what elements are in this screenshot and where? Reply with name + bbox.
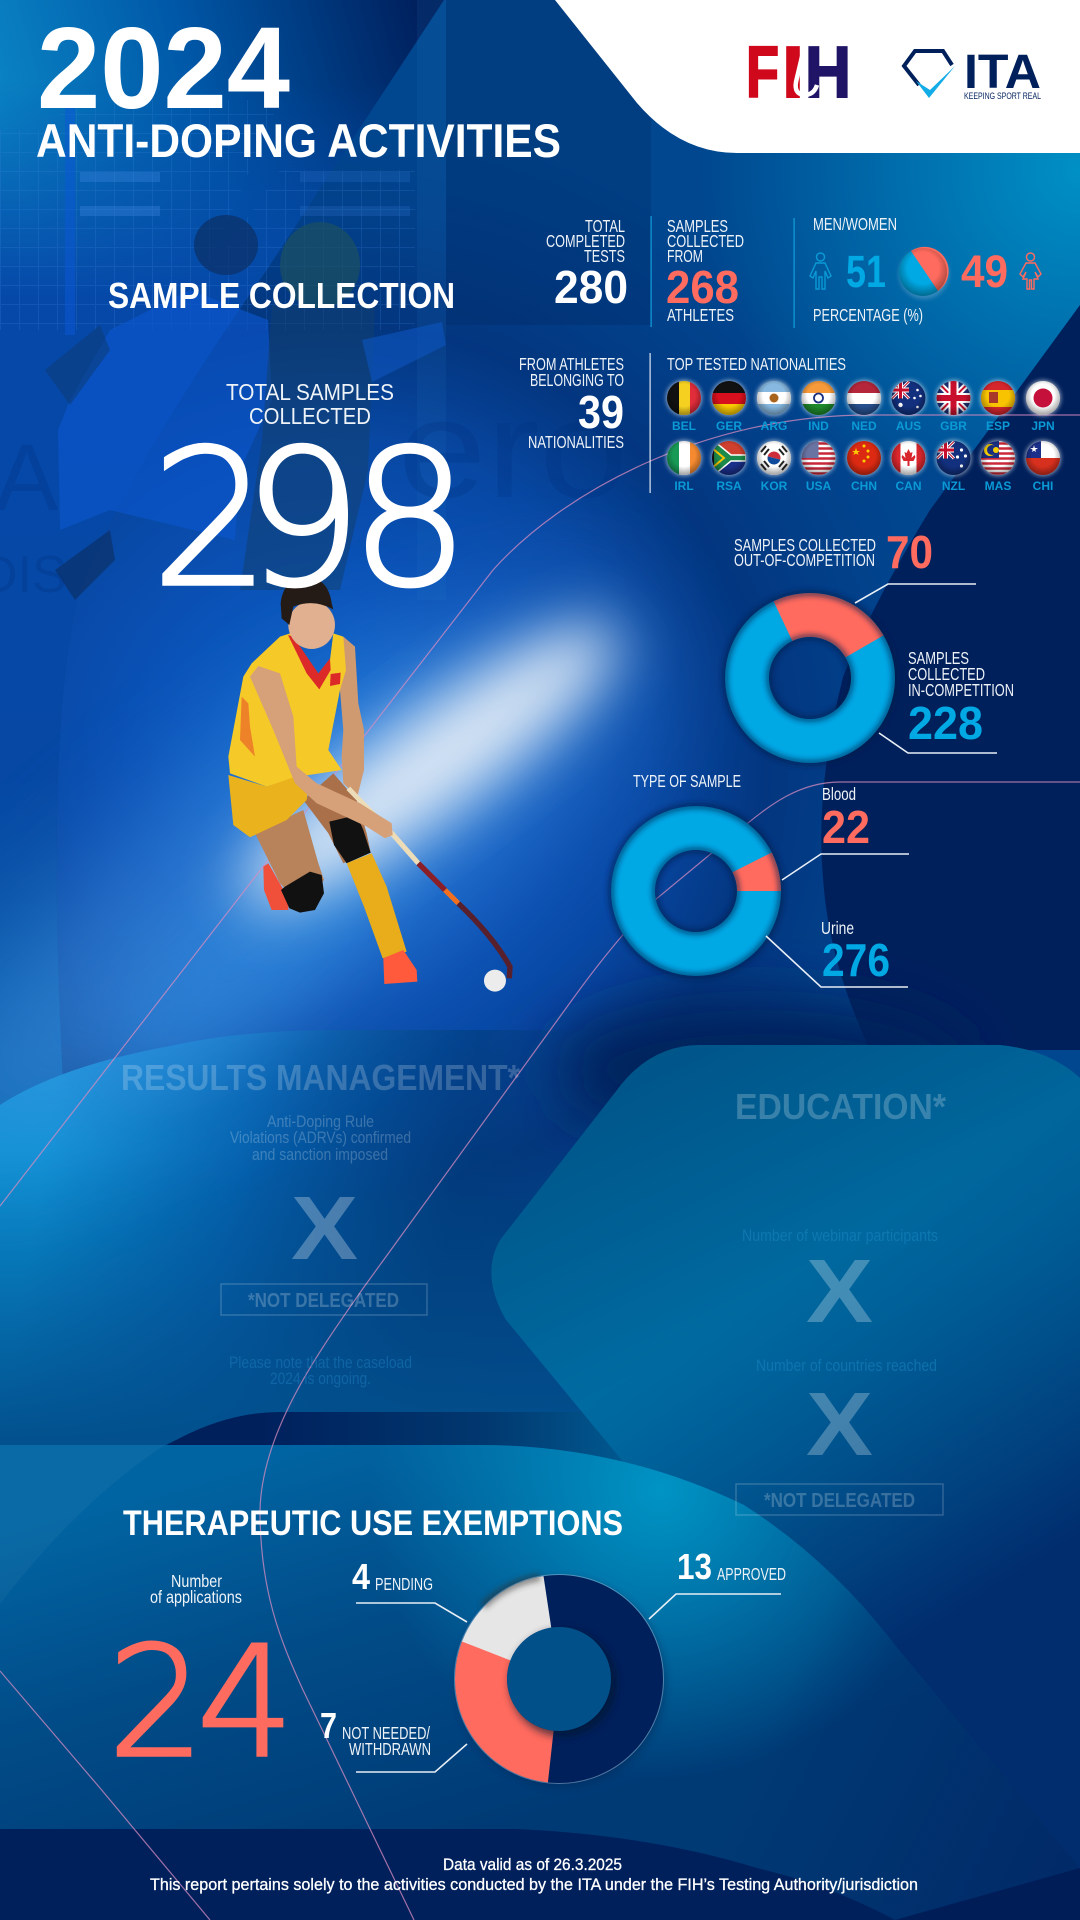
flag: USA <box>802 441 836 475</box>
panel: education: Number of webinar participants <box>742 1226 938 1245</box>
stat: men / women percentage: MEN/WOMEN <box>813 214 897 234</box>
chart: type of sample donut: Urine <box>821 918 854 938</box>
logo: FIH: F <box>746 33 779 113</box>
stat: samples collected from athletes: SAMPLES <box>667 216 728 236</box>
back arm <box>340 637 364 797</box>
flag labels: MAS <box>985 479 1011 493</box>
flag: New Zealand <box>936 441 970 475</box>
flag labels: IRL <box>674 479 694 493</box>
chart: therapeutic use exemptions donut: WITHDRAWN <box>349 1739 431 1759</box>
stat: nationalities <box>519 354 624 452</box>
flag labels: JPN <box>1031 419 1055 433</box>
panel: results management: Anti-Doping Rule <box>267 1112 374 1131</box>
chart: in and out of competition donut: IN-COMPETITION <box>908 680 1014 700</box>
stat: number of applications: of applications <box>150 1587 242 1607</box>
logo: FIH <box>746 33 851 113</box>
flag labels: ARG <box>761 419 787 433</box>
flag labels: USA <box>806 479 831 493</box>
chart: type of sample donut: 276 <box>822 934 890 986</box>
flag labels: NED <box>851 419 877 433</box>
flag: Netherlands <box>847 381 881 415</box>
panel: results management: RESULTS MANAGEMENT* <box>121 1057 520 1098</box>
stat: nationalities: BELONGING TO <box>530 370 624 390</box>
logo: ITA: ITA <box>964 46 1041 99</box>
pie: men women split <box>899 247 949 299</box>
rear leg <box>255 810 324 903</box>
chart: in and out of competition donut: SAMPLES COLLECTED <box>734 535 876 555</box>
panel: education: Number of countries reached <box>756 1356 937 1375</box>
title: 2024 <box>37 3 290 133</box>
flag labels: BEL <box>672 419 696 433</box>
flag: Argentina <box>757 381 791 415</box>
chart: in and out of competition donut: 70 <box>886 526 933 578</box>
stat: nationalities: NATIONALITIES <box>528 432 624 452</box>
chart: therapeutic use exemptions donut: 13 <box>677 1546 712 1587</box>
panel: education: X <box>806 1375 873 1475</box>
flag: Malaysia <box>981 441 1015 475</box>
flag labels: ESP <box>986 419 1010 433</box>
ball <box>484 970 506 992</box>
flag labels: RSA <box>716 479 742 493</box>
head <box>288 601 335 649</box>
footer note: This report pertains solely to the activities conducted by the ITA under the FIH’s Testing Authority/jurisdiction <box>150 1875 918 1894</box>
flag: South Africa <box>712 441 746 475</box>
flag: Belgium <box>667 381 701 415</box>
chart: therapeutic use exemptions donut: PENDING <box>375 1574 433 1594</box>
title <box>36 3 561 167</box>
flag labels: CHN <box>851 479 877 493</box>
panel: results management: and sanction imposed <box>252 1145 388 1164</box>
footer note: Data valid as of 26.3.2025 <box>443 1855 622 1874</box>
flag labels: CAN <box>896 479 922 493</box>
chart: in and out of competition donut: COLLECTED <box>908 664 985 684</box>
flag labels: CHI <box>1033 479 1053 493</box>
panel: results management: *NOT DELEGATED <box>248 1290 399 1312</box>
flag: Chile <box>1026 441 1060 475</box>
background photo: goal net and players <box>0 0 651 604</box>
flag labels: GBR <box>940 419 967 433</box>
flag labels: KOR <box>761 479 788 493</box>
panel: results management: 2024 is ongoing. <box>270 1369 371 1388</box>
total samples collected: TOTAL SAMPLES <box>226 379 394 405</box>
flag: Spain <box>981 381 1015 415</box>
chart: therapeutic use exemptions donut: 7 <box>320 1705 337 1746</box>
flag: South Korea <box>757 441 791 475</box>
stat: total completed tests <box>546 216 628 313</box>
stat: samples collected from athletes: COLLECTED <box>667 231 744 251</box>
stat: number of applications: Number <box>171 1571 222 1591</box>
panel: results management <box>121 1057 520 1388</box>
stat: samples collected from athletes: ATHLETES <box>667 305 734 325</box>
panel: education <box>735 1086 946 1515</box>
panel: top tested nationalities: TOP TESTED NATIONALITIES <box>667 354 846 374</box>
chart: therapeutic use exemptions donut <box>320 1546 786 1787</box>
light beam <box>0 530 698 1230</box>
stat: total completed tests: COMPLETED <box>546 231 625 251</box>
flag labels: NZL <box>942 479 965 493</box>
panel: results management: Please note that the caseload <box>229 1353 412 1372</box>
chart: therapeutic use exemptions donut: NOT NEEDED/ <box>342 1723 430 1743</box>
flag: Great Britain <box>936 381 970 415</box>
flag: Australia <box>892 381 926 415</box>
chart: type of sample donut: 22 <box>822 801 870 853</box>
stat: samples collected from athletes: 268 <box>666 261 739 313</box>
front arm <box>250 666 393 838</box>
flag: Canada <box>892 441 926 475</box>
logo: ITA <box>904 46 1041 101</box>
lower background shapes <box>0 1045 1080 1920</box>
chart: type of sample donut: Blood <box>822 784 856 804</box>
title: ANTI-DOPING ACTIVITIES <box>36 114 561 167</box>
shorts <box>228 775 308 837</box>
stat: samples collected from athletes <box>650 216 744 327</box>
stat: men / women percentage <box>794 214 1041 328</box>
jersey <box>228 633 346 787</box>
stick <box>348 788 418 863</box>
stat: number of applications: 24 <box>108 1614 294 1791</box>
flag: Ireland <box>667 441 701 475</box>
stat: total completed tests: TESTS <box>584 246 625 266</box>
stat: men / women percentage: PERCENTAGE (%) <box>813 305 923 325</box>
total samples collected: COLLECTED <box>249 403 371 429</box>
background photo: goal net and players: ero <box>398 370 628 527</box>
stat: nationalities: 39 <box>578 386 624 438</box>
stat: total completed tests: 280 <box>554 261 628 313</box>
stat: total completed tests: TOTAL <box>585 216 625 236</box>
panel: results management: Violations (ADRVs) confirmed <box>230 1128 411 1147</box>
logo: ITA: KEEPING SPORT REAL <box>964 91 1041 101</box>
flag labels <box>672 419 1055 493</box>
front leg <box>303 773 371 863</box>
chart: therapeutic use exemptions donut: 4 <box>352 1556 370 1597</box>
footer note <box>150 1855 918 1894</box>
results background shape <box>0 1030 700 1445</box>
chart: in and out of competition donut: SAMPLES <box>908 648 969 668</box>
chart: therapeutic use exemptions donut: APPROVED <box>717 1564 786 1584</box>
chart: in and out of competition donut <box>725 526 1014 763</box>
stat: nationalities: FROM ATHLETES <box>519 354 624 374</box>
heading: therapeutic use exemptions: THERAPEUTIC USE EXEMPTIONS <box>123 1504 623 1543</box>
flag: China <box>847 441 881 475</box>
flag: Japan <box>1026 381 1060 415</box>
stat: samples collected from athletes: FROM <box>667 246 703 266</box>
panel: education: X <box>806 1242 873 1342</box>
flag: India <box>802 381 836 415</box>
panel: top tested nationalities <box>650 353 1061 493</box>
flag labels: GER <box>716 419 742 433</box>
stat: men / women percentage: 49 <box>961 246 1008 297</box>
chart: type of sample donut <box>611 771 909 987</box>
chart: in and out of competition donut: 228 <box>908 697 983 749</box>
panel: education: *NOT DELEGATED <box>764 1490 915 1512</box>
header logo panel <box>555 0 1080 153</box>
heading: sample collection: SAMPLE COLLECTION <box>108 275 455 316</box>
flag: Germany <box>712 381 746 415</box>
background <box>0 0 1080 1140</box>
chart: type of sample donut: TYPE OF SAMPLE <box>633 771 741 791</box>
panel: results management: X <box>291 1179 358 1279</box>
total samples collected: 298 <box>151 410 470 629</box>
stat: men / women percentage: 51 <box>846 246 886 297</box>
logo: FIH: H <box>805 33 851 113</box>
icon: woman <box>1020 253 1041 289</box>
chart: in and out of competition donut: OUT-OF-COMPETITION <box>734 550 875 570</box>
logo: FIH: I <box>782 33 804 113</box>
player illustration <box>228 577 510 992</box>
flag labels: AUS <box>896 419 921 433</box>
flag labels: IND <box>808 419 829 433</box>
icon: man <box>810 253 831 289</box>
panel: education: EDUCATION* <box>735 1086 946 1127</box>
decorative pink curves <box>0 415 1080 1920</box>
